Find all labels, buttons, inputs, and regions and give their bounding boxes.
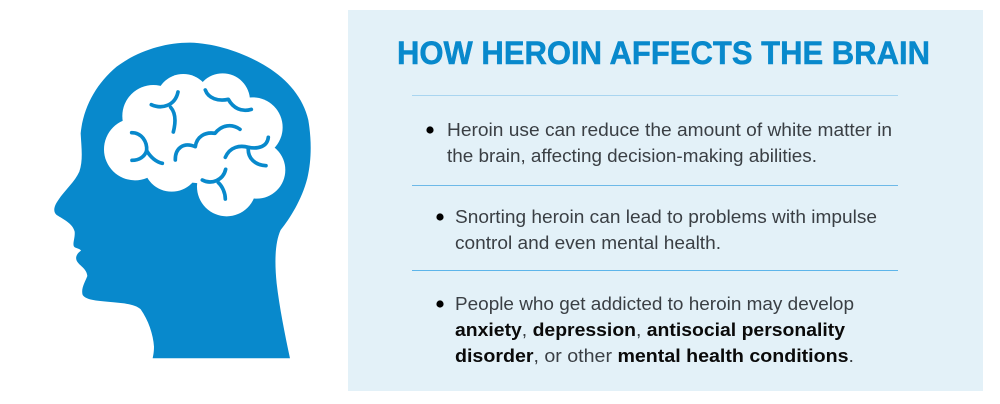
head silhouette — [54, 43, 311, 358]
bullet one — [426, 120, 892, 166]
icon: head with brain — [54, 43, 311, 358]
heading: HOW HEROIN AFFECTS THE BRAIN — [397, 35, 930, 71]
bullet three — [436, 294, 854, 366]
panel: heroin effects on the brain — [348, 10, 983, 391]
bullet three: disorder , or other mental health conditions . — [455, 346, 854, 366]
bullet one: the brain, affecting decision-making abilities. — [447, 146, 817, 166]
bullet one: Heroin use can reduce the amount of white matter in — [447, 120, 892, 140]
bullet two — [436, 207, 877, 253]
brain folds — [132, 90, 268, 199]
bullet two: control and even mental health. — [455, 233, 721, 253]
brain — [104, 73, 285, 216]
bullet three: anxiety , depression , antisocial personality — [455, 320, 845, 340]
bullet three: People who get addicted to heroin may develop — [455, 294, 854, 314]
bullet two: Snorting heroin can lead to problems with impulse — [455, 207, 877, 227]
